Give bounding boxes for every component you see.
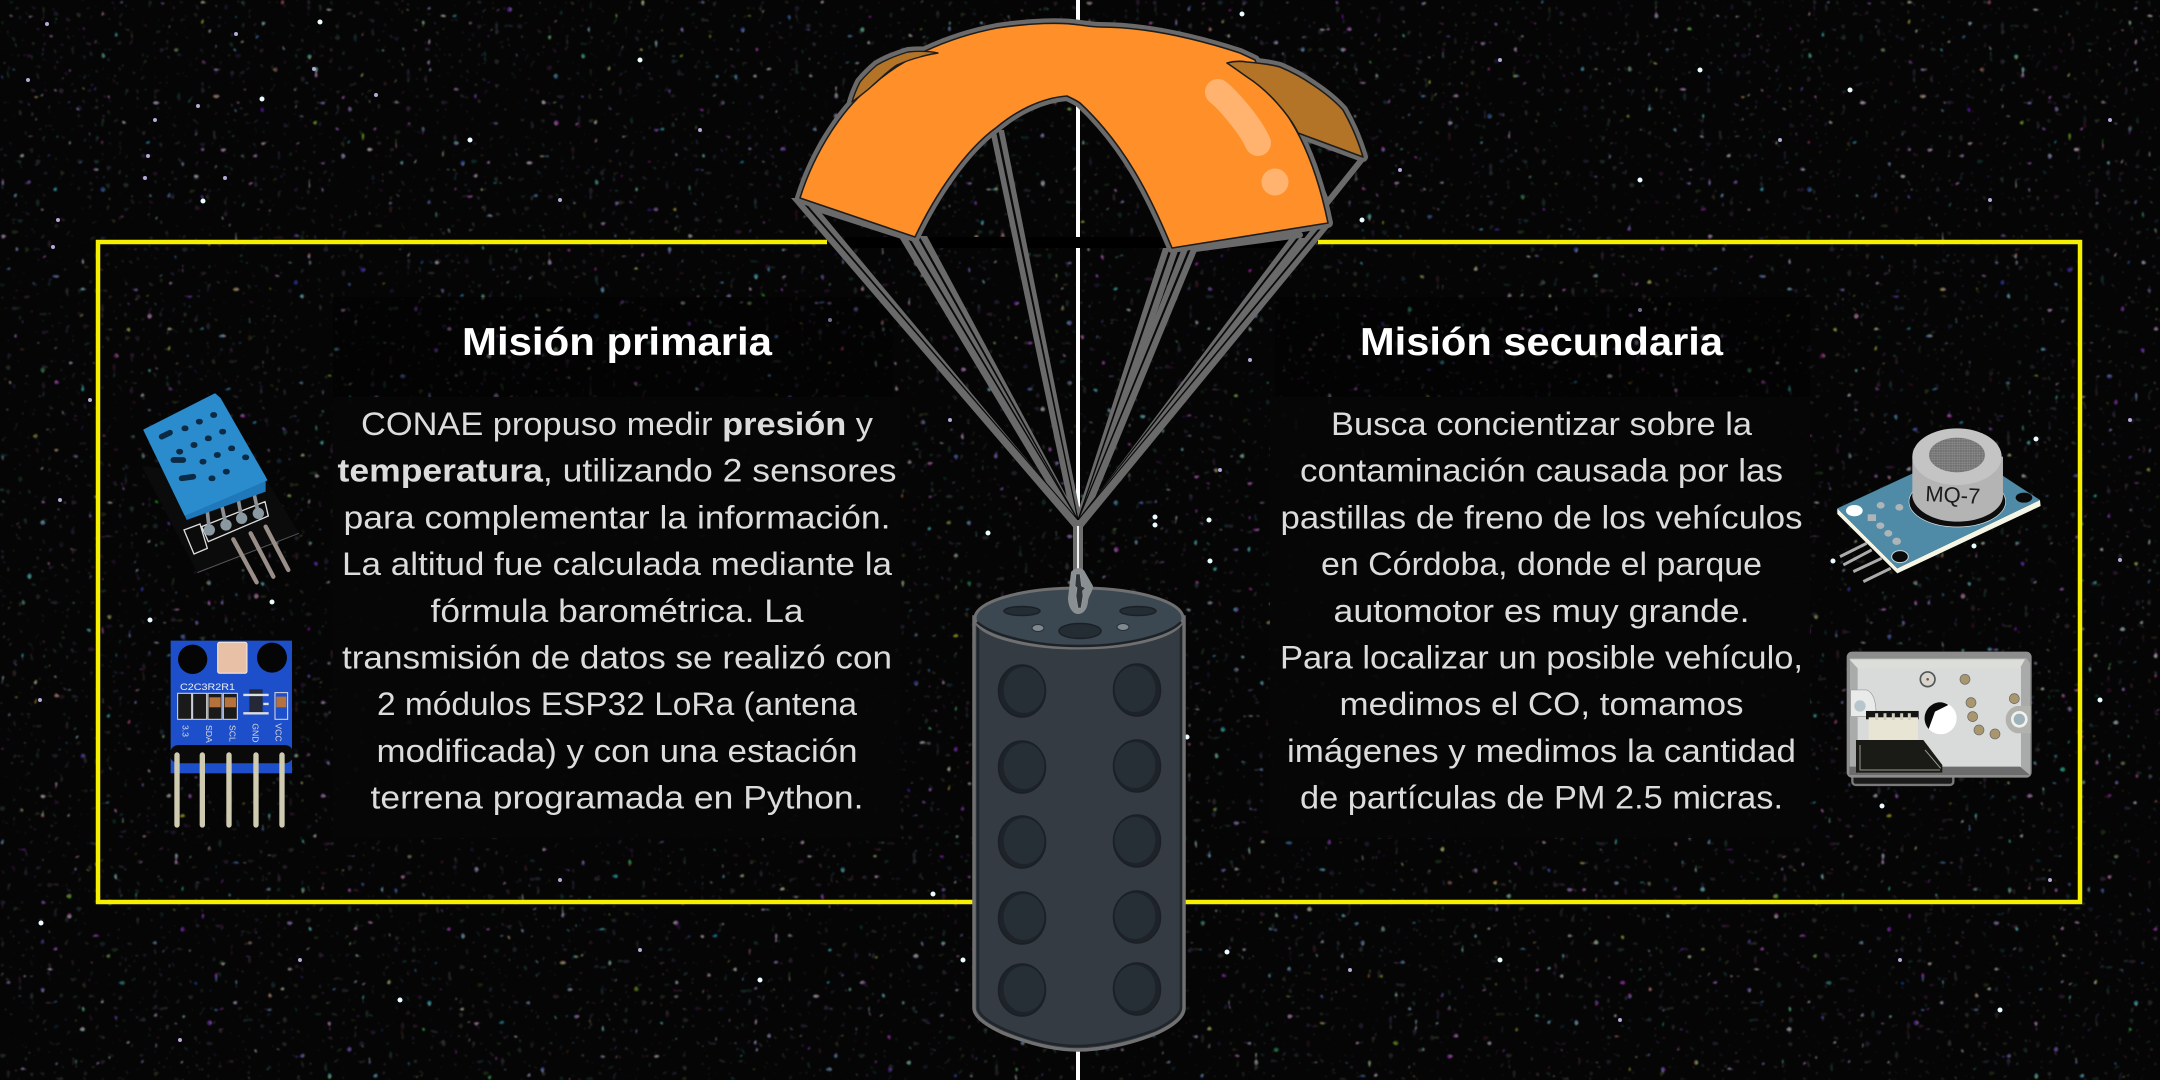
icon: pressure sensor board: 3.3 — [180, 725, 190, 737]
text block: primary mission: terrena programada en Python. — [370, 780, 864, 816]
text block: secondary mission: Para localizar un posible vehículo, — [1280, 640, 1803, 676]
text block: primary mission: para complementar la información. — [344, 499, 890, 535]
text block: secondary mission: pastillas de freno de los vehículos — [1280, 499, 1802, 535]
front panel — [800, 23, 1328, 248]
icon: pressure sensor board: GND — [250, 723, 260, 743]
icon: MQ-7 gas sensor — [1837, 428, 2041, 582]
text block: primary mission: 2 módulos ESP32 LoRa (antena — [377, 686, 857, 722]
heading: Misión secundaria: Misión secundaria — [1360, 321, 1723, 364]
text block: secondary mission: en Córdoba, donde el parque — [1321, 546, 1762, 582]
text block: primary mission: fórmula barométrica. La — [430, 593, 804, 629]
top lid — [975, 588, 1183, 648]
heading: Misión primaria: Misión primaria — [462, 321, 772, 364]
icon: cylinder can-satellite — [974, 588, 1184, 1050]
text block: primary mission: CONAE propuso medir presión y — [361, 406, 873, 442]
icon: pressure sensor board: SDA — [204, 725, 214, 743]
icon: parachute canopy — [800, 23, 1363, 248]
icon: line stem and hook — [1068, 526, 1093, 614]
text block: primary mission: La altitud fue calculada mediante la — [342, 546, 892, 582]
back panel left — [852, 51, 938, 102]
icon: dust particle sensor — [1847, 652, 2032, 785]
text block: secondary mission: Busca concientizar sobre la — [1331, 406, 1752, 442]
text block: primary mission: transmisión de datos se realizó con — [342, 640, 892, 676]
icon: MQ-7 gas sensor: MQ-7 — [1925, 481, 1981, 509]
back panel right — [1227, 61, 1363, 157]
text block: primary mission — [338, 406, 896, 816]
text block: primary mission: modificada) y con una estación — [376, 733, 858, 769]
lid holes — [1004, 606, 1156, 638]
icon: parachute suspension lines — [791, 130, 1363, 527]
lid screws — [1032, 624, 1129, 632]
icon: pressure sensor board: SCL — [227, 725, 237, 742]
text block: secondary mission: automotor es muy grande. — [1334, 593, 1750, 629]
icon: pressure sensor board — [170, 641, 293, 825]
text block: secondary mission: medimos el CO, tomamos — [1340, 686, 1744, 722]
cylinder body — [974, 617, 1184, 1050]
text block: secondary mission — [1280, 406, 1803, 816]
side holes — [998, 664, 1160, 1016]
white centre line — [1076, 0, 1080, 1080]
icon: pressure sensor board: VCC — [273, 723, 283, 742]
text block: secondary mission: imágenes y medimos la cantidad — [1287, 733, 1796, 769]
icon: pressure sensor board: C2C3R2R1 — [180, 682, 235, 692]
text block: primary mission: temperatura , utilizando 2 sensores — [338, 453, 896, 489]
text block: secondary mission: de partículas de PM 2.5 micras. — [1300, 780, 1783, 816]
panel: text backdrops — [333, 297, 1810, 838]
text block: secondary mission: contaminación causada por las — [1300, 453, 1783, 489]
icon: DHT temperature sensor — [142, 394, 299, 582]
canopy grey outline — [800, 23, 1363, 248]
highlight dot — [1262, 168, 1288, 196]
yellow frame — [98, 242, 2080, 902]
highlight stroke — [1218, 92, 1258, 143]
black band behind parachute — [845, 237, 1293, 248]
